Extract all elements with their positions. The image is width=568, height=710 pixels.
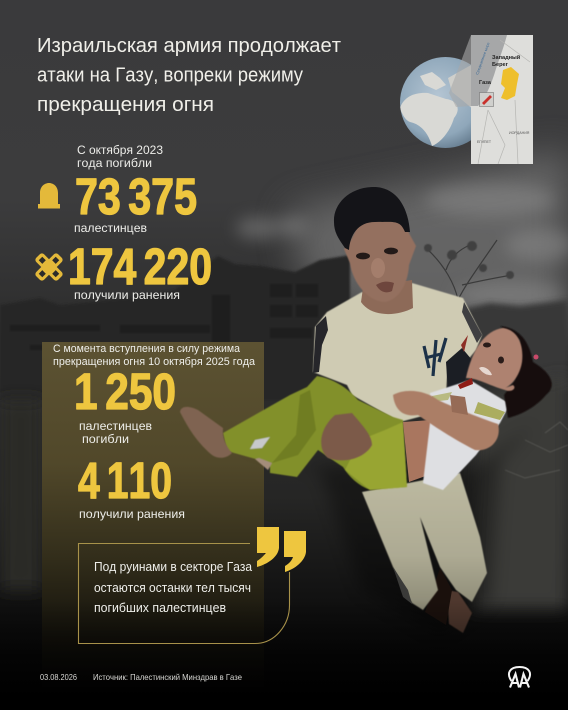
ceasefire intro	[53, 343, 256, 368]
label: palestinians killed	[79, 419, 152, 446]
number: wounded since ceasefire: 4 110	[78, 452, 172, 509]
girl head and hair	[500, 326, 552, 418]
title: прекращения огня	[37, 93, 214, 116]
ceasefire intro: прекращения огня 10 октября 2025 года	[53, 356, 256, 368]
map labels: Газа	[479, 80, 492, 86]
photo: boy and girl	[180, 187, 552, 635]
west bank	[501, 67, 519, 100]
label: palestinians killed: погибли	[82, 432, 129, 446]
number: killed since ceasefire: 1 250	[74, 363, 176, 420]
quote marks	[257, 527, 306, 572]
label: wounded since ceasefire: получили ранения	[79, 507, 185, 521]
sea	[471, 35, 507, 106]
ceasefire intro: С момента вступления в силу режима	[53, 343, 241, 355]
title: Израильская армия продолжает	[37, 34, 342, 57]
quote text: остаются останки тел тысяч	[94, 581, 251, 595]
ground rubble	[0, 375, 568, 610]
map panel: Средиземное море	[475, 42, 491, 75]
icon: tombstone	[38, 183, 60, 208]
callout quote	[78, 527, 306, 644]
map inset	[400, 35, 533, 164]
girl belly	[403, 420, 431, 482]
block: casualties since October 2023	[27, 143, 212, 302]
footer source: Источник: Палестинский Минздрав в Газе	[93, 673, 242, 682]
tree	[424, 240, 514, 300]
gaza box and strip	[480, 92, 494, 106]
title: атаки на Газу, вопреки режиму	[37, 64, 304, 86]
intro text: С октября 2023	[77, 143, 163, 157]
boy head	[361, 280, 413, 314]
globe	[400, 57, 471, 148]
foot	[180, 407, 232, 458]
map panel: ИОРДАНИЯ	[509, 131, 530, 135]
title	[37, 34, 342, 116]
soft shadow under figures	[205, 425, 535, 635]
map labels	[479, 55, 520, 84]
shirt logo	[424, 338, 446, 376]
label: wounded: получили ранения	[74, 288, 180, 302]
footer date: 03.08.2026	[40, 673, 77, 682]
icon: bandage	[27, 245, 71, 289]
label: palestinians killed: палестинцев	[79, 419, 152, 433]
panel: ceasefire figures	[42, 342, 264, 687]
quote text	[94, 560, 252, 615]
boy hand	[321, 413, 372, 460]
bottom vignette	[0, 600, 568, 710]
green trousers	[223, 376, 407, 490]
block: casualties since ceasefire	[53, 343, 256, 521]
map labels: Западный	[492, 54, 521, 61]
logo: Anadolu Agency	[509, 667, 530, 688]
boy legs	[362, 473, 487, 633]
intro text	[77, 143, 163, 170]
map panel	[471, 35, 533, 164]
map labels: Берег	[492, 62, 509, 68]
number: wounded: 174 220	[68, 238, 212, 295]
girl shirt	[423, 380, 510, 490]
ruined buildings	[0, 255, 568, 400]
girl arm and hands	[393, 391, 499, 450]
map panel: ЕГИПЕТ	[477, 140, 492, 144]
label: palestinians: палестинцев	[74, 221, 147, 235]
zoom connector	[449, 35, 471, 107]
number: killed: 73 375	[75, 168, 197, 225]
quote text: погибших палестинцев	[94, 601, 226, 615]
quote text: Под руинами в секторе Газа	[94, 560, 252, 574]
intro text: года погибли	[77, 156, 152, 170]
boy shirt	[313, 283, 482, 422]
quote frame	[78, 544, 290, 644]
